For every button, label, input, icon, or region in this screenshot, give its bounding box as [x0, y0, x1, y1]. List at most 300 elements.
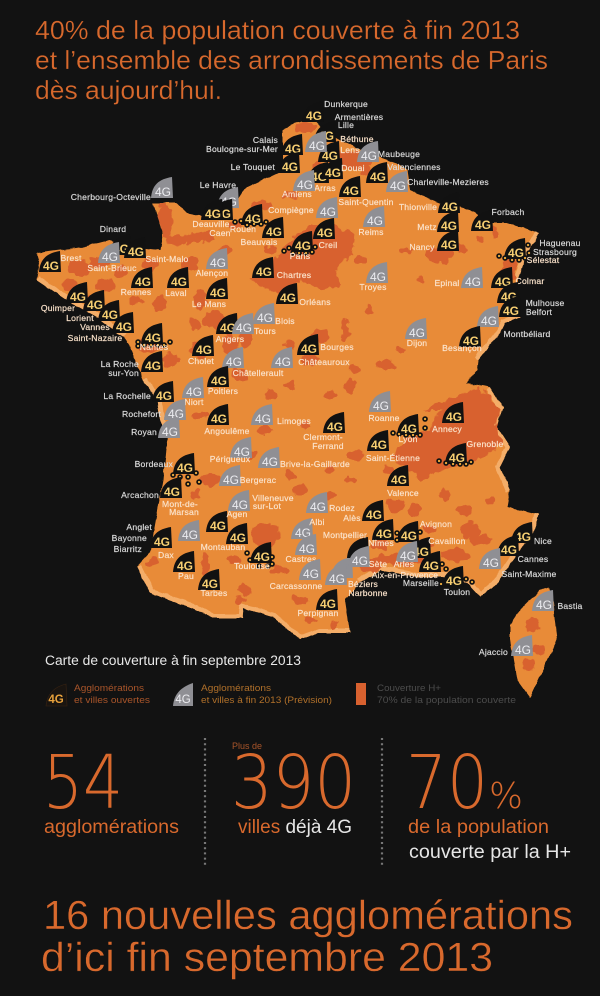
city: Caen: 4G	[215, 207, 231, 221]
city: Castres: 4G	[299, 542, 315, 556]
city: Royan: Royan	[131, 427, 157, 437]
city: Lyon cluster: Lyon	[398, 434, 418, 444]
city: Annecy	[432, 402, 464, 434]
city: Besançon: Besançon	[442, 343, 482, 353]
city: Roanne	[368, 391, 400, 423]
city: Narbonne: 4G	[329, 572, 345, 586]
city: Saint-Étienne	[366, 430, 420, 463]
territory: mainland and Corsica	[37, 118, 557, 698]
city: Saint-Maxime: Saint-Maxime	[502, 569, 556, 579]
city: Saint-Nazaire: 4G	[116, 320, 132, 334]
city: Belfort	[499, 296, 553, 318]
city: Annecy: Annecy	[432, 424, 462, 434]
city: Brest	[39, 251, 82, 273]
footer headline	[41, 892, 573, 980]
city: Châtellerault	[222, 347, 284, 378]
label: Marseille: Marseille	[403, 578, 439, 588]
city: Saint-Quentin: Saint-Quentin	[338, 197, 394, 207]
city: Toulon cluster	[441, 566, 472, 597]
footer headline: d’ici fin septembre 2013	[41, 934, 493, 980]
city: Maubeuge: Maubeuge	[378, 149, 420, 159]
city: Limoges	[251, 404, 311, 426]
city: Valence	[387, 465, 419, 498]
title: et l’ensemble des arrondissements de Paris	[35, 45, 548, 75]
city: Montpellier	[323, 530, 369, 558]
city: Alençon	[196, 248, 228, 278]
city: Châteauroux	[271, 347, 350, 369]
city: Carcassonne	[270, 559, 322, 591]
city: Colmar: 4G	[495, 275, 511, 289]
city: Besançon	[442, 326, 482, 353]
city: Blois: 4G	[257, 311, 273, 325]
city: Ajaccio: 4G	[515, 643, 531, 657]
city: Roanne: 4G	[373, 399, 389, 413]
city: Bastia: Bastia	[557, 601, 583, 611]
city: Aix-en-Provence: 4G	[423, 559, 439, 573]
city: Béthune: 4G	[309, 139, 325, 153]
city: Alençon: Alençon	[196, 268, 228, 278]
city: Reims: 4G	[367, 214, 383, 228]
city: Alès: 4G	[366, 508, 382, 522]
city: Dinard: 4G	[113, 242, 129, 256]
city: Bourges: Bourges	[320, 342, 354, 352]
city: Arras: Arras	[314, 183, 336, 193]
city: La Roche-sur-Yon: sur-Yon	[108, 368, 139, 378]
label: Mont-de-Marsan	[162, 499, 199, 517]
city: Reims: Reims	[358, 227, 384, 237]
city: Dijon: Dijon	[407, 338, 427, 348]
city: Tours: 4G	[236, 321, 252, 335]
city: Aix-en-Provence	[372, 551, 446, 580]
city: Troyes	[359, 262, 388, 292]
city: Lorient: 4G	[87, 298, 103, 312]
city: Perpignan	[298, 589, 339, 618]
legend item: open cities: Agglomérations	[74, 683, 144, 694]
city: Saint-Brieuc: Saint-Brieuc	[87, 263, 137, 273]
city: Poitiers	[207, 366, 238, 396]
city: Boulogne-sur-Mer and Le Touquet: 4G	[282, 160, 298, 174]
legend item: H+ coverage: 70% de la population couverte	[377, 695, 516, 706]
city: Tarbes: 4G	[202, 577, 218, 591]
city: Blois: Blois	[275, 316, 295, 326]
city: Charleville-Mézières	[386, 171, 489, 193]
city: Orléans: 4G	[280, 291, 296, 305]
stat: 54 agglomérations	[43, 740, 179, 838]
city: Limoges: 4G	[255, 412, 271, 426]
stat: 70% de la population: de la population	[408, 817, 549, 838]
city: Colmar: Colmar	[516, 276, 544, 286]
city: Alès: Alès	[343, 513, 361, 523]
city: Narbonne	[325, 564, 388, 598]
city: Saint-Brieuc: 4G	[102, 250, 118, 264]
city: Épinal	[434, 267, 483, 289]
city: Beauvais	[241, 217, 284, 247]
city: Brest: 4G	[43, 259, 59, 273]
city: Valenciennes: 4G	[370, 170, 386, 184]
city: Saint-Quentin: 4G	[343, 184, 359, 198]
city: Boulogne-sur-Mer and Le Touquet	[206, 144, 300, 174]
city: Arras	[307, 162, 336, 193]
city: Laval	[165, 267, 189, 298]
city: Nice: 4G	[515, 530, 531, 544]
city: Villeneuve-sur-Lot: sur-Lot	[253, 501, 281, 511]
city: Montauban: 4G	[230, 531, 246, 545]
city: Pau: 4G	[177, 559, 193, 573]
city: Arles	[394, 541, 418, 569]
city: Armentières and Lille: Armentières	[335, 112, 383, 122]
city: Strasbourg cluster: Haguenau	[539, 238, 581, 248]
city: Rouen cluster: 4G	[245, 212, 261, 226]
city: Bastia	[532, 590, 583, 612]
city: Châtellerault: Châtellerault	[233, 368, 284, 378]
city: Chartres: 4G	[256, 265, 272, 279]
city: Agen: 4G	[210, 519, 226, 533]
city: Bergerac	[219, 465, 277, 487]
city: Sète	[348, 546, 387, 569]
label: Mont-de-Marsan: Marsan	[169, 507, 199, 517]
city: Alençon: 4G	[210, 256, 226, 270]
city: Bordeaux cluster: 4G	[177, 461, 193, 475]
stat: 54 agglomérations: 54	[43, 740, 123, 826]
city: Arras: 4G	[311, 170, 327, 184]
city: Castres	[285, 534, 317, 564]
city: Laval: Laval	[165, 288, 187, 298]
city: Épinal: 4G	[465, 275, 481, 289]
city: Nancy: 4G	[441, 238, 457, 252]
label: Mont-de-Marsan: Mont-de-	[162, 499, 198, 509]
city: Beauvais: 4G	[266, 225, 282, 239]
city: Lens: 4G	[322, 149, 338, 163]
city: Dunkerque: 4G	[306, 109, 322, 123]
city: Nancy	[409, 230, 459, 252]
city: La Roche-sur-Yon: 4G	[145, 359, 161, 373]
city: Forbach: Forbach	[492, 207, 524, 217]
city: Avignon cluster: Avignon	[420, 519, 452, 529]
title: 40% de la population couverte à fin 2013	[35, 15, 520, 45]
city: Nîmes: 4G	[376, 527, 392, 541]
map of France with 4G cities	[37, 99, 583, 698]
city: Charleville-Mézières: 4G	[390, 179, 406, 193]
city: Cannes: Cannes	[518, 554, 548, 564]
city: Anglet, Bayonne, Biarritz: 4G	[154, 535, 170, 549]
city: Bourges: 4G	[301, 342, 317, 356]
city: Rouen cluster	[230, 204, 266, 234]
city: Compiègne: Compiègne	[268, 205, 314, 215]
city: Brive-la-Gaillarde	[258, 447, 350, 469]
city: Boulogne-sur-Mer and Le Touquet: Boulogne-sur-Mer	[206, 144, 278, 154]
city: Compiègne: 4G	[320, 205, 336, 219]
city: Royan: 4G	[162, 425, 178, 439]
title	[35, 15, 548, 105]
city: Niort: Niort	[184, 397, 204, 407]
city: Nice: Nice	[534, 536, 552, 546]
city: Grenoble cluster: Grenoble	[467, 439, 503, 449]
city: Dijon	[405, 318, 427, 348]
city: Angoulême	[204, 404, 250, 436]
city: Le Mans	[192, 278, 228, 309]
legend item: H+ coverage	[356, 683, 516, 706]
city: Douai: 4G	[325, 166, 341, 180]
city: Bourges	[297, 334, 354, 356]
city: Quimper: 4G	[70, 290, 86, 304]
city: Mulhouse: Mulhouse	[526, 298, 564, 308]
city: Épinal: Epinal	[434, 278, 460, 288]
stat: plus de 390 villes: villes déjà 4G	[238, 817, 352, 838]
city: Saint-Maxime: 4G	[483, 556, 499, 570]
city: Villeneuve-sur-Lot: 4G	[232, 498, 248, 512]
city: Béthune	[305, 131, 374, 153]
city: Vannes: Vannes	[80, 322, 110, 332]
city: Rennes: 4G	[135, 275, 151, 289]
city: Saint-Maxime	[479, 548, 556, 579]
city: Blois	[253, 303, 295, 326]
city: Besançon: 4G	[463, 334, 479, 348]
city: Avignon cluster	[397, 519, 452, 543]
city: Armentières and Lille: Lille	[338, 120, 354, 130]
city: Montauban: Montauban	[201, 542, 245, 552]
city: Tarbes: Tarbes	[200, 588, 228, 598]
city: Poitiers: Poitiers	[208, 386, 238, 396]
city: Lorient: Lorient	[66, 313, 94, 323]
H+ coverage areas	[62, 122, 544, 671]
stat: plus de 390 villes: 390	[231, 740, 356, 826]
city: Creil	[313, 218, 337, 250]
city: Cholet	[188, 335, 214, 366]
city: Limoges: Limoges	[277, 416, 311, 426]
city: Carcassonne: 4G	[303, 567, 319, 581]
city: Cherbourg-Octeville: 4G	[155, 185, 171, 199]
city: Valenciennes: Valenciennes	[387, 162, 441, 172]
city: Douai: Douai	[341, 163, 365, 173]
city: Carcassonne: Carcassonne	[270, 581, 322, 591]
city: Nîmes	[368, 519, 394, 548]
city: Cherbourg-Octeville	[71, 177, 173, 202]
city: Villeneuve-sur-Lot	[228, 490, 294, 512]
city: Mulhouse: 4G	[501, 290, 517, 304]
city: Castres: Castres	[285, 554, 317, 564]
city: Albi	[291, 517, 325, 540]
city: Anglet, Bayonne, Biarritz: Anglet	[126, 522, 152, 532]
city: Toulouse cluster: 4G	[254, 550, 270, 564]
city: Nice	[511, 522, 552, 546]
city: Nancy: Nancy	[409, 242, 435, 252]
city: Armentières and Lille	[314, 112, 383, 143]
stat: 70% de la population	[406, 740, 571, 863]
city: Laval: 4G	[171, 275, 187, 289]
city: Clermont-Ferrand	[303, 412, 345, 451]
city: Tours	[232, 313, 276, 336]
city: Strasbourg cluster	[499, 238, 581, 265]
city: Narbonne: Narbonne	[348, 588, 388, 598]
city: Anglet, Bayonne, Biarritz: Bayonne	[112, 533, 147, 543]
footer headline: 16 nouvelles agglomérations	[43, 892, 573, 938]
city: Agen: Agen	[227, 509, 247, 519]
city: Angers	[216, 313, 244, 344]
stat: 70% de la population: %	[489, 776, 523, 817]
city: Bastia: 4G	[536, 598, 552, 612]
city: Le Havre: Le Havre	[200, 180, 236, 190]
divider	[381, 738, 383, 866]
city: Saint-Nazaire: Saint-Nazaire	[68, 333, 122, 343]
city: Clermont-Ferrand: 4G	[327, 420, 343, 434]
city: Montauban	[201, 523, 248, 552]
legend item: cities planned by end 2013	[173, 683, 332, 706]
city: Cholet: Cholet	[188, 356, 214, 366]
city: Caen: Caen	[209, 228, 231, 238]
city: Beauvais: Beauvais	[241, 237, 277, 247]
city: Cavaillon: 4G	[413, 545, 429, 559]
city: Cavaillon	[409, 536, 466, 559]
city: Dax: Dax	[158, 550, 174, 560]
city: Châtellerault: 4G	[226, 355, 242, 369]
city: Nantes cluster	[138, 323, 170, 352]
city: Amiens: 4G	[297, 178, 313, 192]
city: Angers: Angers	[216, 334, 244, 344]
city: Amiens: Amiens	[282, 189, 312, 199]
stat: 54 agglomérations: agglomérations	[44, 817, 179, 838]
city: Saint-Étienne: 4G	[371, 438, 387, 452]
city: Cannes: 4G	[501, 543, 517, 557]
city: Troyes: Troyes	[359, 282, 387, 292]
city: Vannes: 4G	[102, 308, 118, 322]
city: Dunkerque: Dunkerque	[324, 99, 368, 109]
city: Chartres: Chartres	[277, 270, 311, 280]
city: Montbéliard: 4G	[481, 314, 497, 328]
legend item: H+ coverage: Couverture H+	[377, 683, 441, 694]
city: Thionville: Thionville	[399, 202, 437, 212]
city: Lyon cluster	[393, 414, 425, 444]
city: Creil: 4G	[317, 226, 333, 240]
city: Metz	[417, 211, 459, 233]
city: Clermont-Ferrand: Ferrand	[312, 441, 344, 451]
city: Forbach: 4G	[475, 218, 491, 232]
city: Maubeuge	[357, 141, 420, 163]
city: Pau	[173, 551, 195, 581]
city: Rodez: 4G	[310, 500, 326, 514]
city: Rodez: Rodez	[329, 503, 355, 513]
city: Saint-Étienne: Saint-Étienne	[366, 453, 420, 463]
city: Clermont-Ferrand: Clermont-	[303, 432, 343, 442]
city: Lorient	[66, 290, 105, 323]
city: Toulon cluster: Toulon	[444, 587, 470, 597]
city: Angers: 4G	[220, 321, 236, 335]
city: Mulhouse	[497, 282, 564, 308]
city: Rochefort: Rochefort	[122, 409, 161, 419]
city: Nantes cluster: 4G	[145, 331, 161, 345]
city: Paris cluster: Paris	[290, 251, 310, 261]
city: Belfort: Belfort	[526, 307, 553, 317]
city: Bordeaux cluster: Bordeaux	[135, 459, 174, 469]
city: Montbéliard: Montbéliard	[503, 329, 551, 339]
city: Saint-Malo: 4G	[128, 245, 144, 259]
stat: plus de 390 villes: Plus de	[232, 741, 262, 751]
city: Brive-la-Gaillarde: 4G	[262, 455, 278, 469]
city: Saint-Brieuc	[87, 242, 137, 273]
legend item: cities planned by end 2013: Agglomérations	[201, 683, 271, 694]
city: Amiens	[282, 170, 315, 199]
city: Thionville: 4G	[442, 200, 458, 214]
city: Bordeaux cluster	[135, 453, 199, 484]
city: Tours: Tours	[254, 326, 276, 336]
city: Anglet, Bayonne, Biarritz	[112, 522, 172, 554]
city: Ajaccio: Ajaccio	[479, 647, 508, 657]
stat: 70% de la population: couverte par la H+	[409, 842, 571, 863]
city: Grenoble cluster	[439, 439, 503, 465]
city: Nantes cluster: Nantes	[140, 342, 168, 352]
city: Arles: Arles	[394, 559, 414, 569]
city: Nîmes: Nîmes	[368, 538, 394, 548]
city: Arles: 4G	[400, 549, 416, 563]
title: dès aujourd’hui.	[35, 75, 222, 105]
city: Deauville: Deauville	[192, 219, 230, 229]
city: Tarbes	[198, 569, 228, 598]
city: Perpignan: 4G	[320, 597, 336, 611]
city: Lens: Lens	[340, 145, 360, 155]
city: Alès	[343, 500, 384, 523]
city: Toulon cluster: 4G	[446, 574, 462, 588]
city: Périgueux: Périgueux	[210, 454, 251, 464]
city: Saint-Malo: Saint-Malo	[145, 254, 189, 264]
city: Armentières and Lille: 4G	[318, 129, 334, 143]
city: Strasbourg cluster: Strasbourg	[533, 247, 577, 257]
city: Béthune: Béthune	[340, 134, 374, 144]
city: Toulouse cluster: Toulouse	[234, 561, 270, 571]
city: Caen	[209, 199, 233, 238]
city: Calais	[253, 134, 303, 156]
city: Ajaccio	[479, 635, 533, 657]
city: Creil: Creil	[319, 240, 337, 250]
city: Albi: Albi	[309, 517, 325, 527]
city: Niort: 4G	[186, 385, 202, 399]
city: Lens	[318, 141, 360, 163]
city: Thionville	[399, 192, 460, 214]
city: Strasbourg cluster: 4G	[508, 246, 524, 260]
city: Orléans: Orléans	[299, 297, 331, 307]
city: Valence: Valence	[387, 488, 419, 498]
city: Rennes	[121, 267, 153, 297]
city: Orléans	[276, 283, 331, 307]
city: Lyon cluster: 4G	[401, 422, 417, 436]
city: Boulogne-sur-Mer and Le Touquet: Le Touquet	[231, 162, 275, 172]
city: Dunkerque	[302, 99, 368, 123]
city: Vannes	[80, 300, 120, 332]
legend	[45, 653, 516, 706]
city: Dinard	[100, 224, 131, 256]
city: Béziers: Béziers	[348, 579, 378, 589]
city: Toulouse cluster	[234, 542, 272, 571]
city: Saint-Quentin	[338, 176, 394, 207]
city: Chartres	[252, 257, 311, 280]
city: Bergerac: 4G	[223, 473, 239, 487]
city: Dax: 4G	[182, 528, 198, 542]
city: Calais: 4G	[285, 142, 301, 156]
legend item: open cities	[46, 683, 150, 706]
city: La Rochelle: La Rochelle	[103, 391, 151, 401]
city: Cherbourg-Octeville: Cherbourg-Octeville	[71, 192, 151, 202]
stat: 70% de la population: 70	[406, 740, 488, 826]
city: Cavaillon: Cavaillon	[428, 536, 466, 546]
city: Châteauroux: 4G	[275, 355, 291, 369]
city: Dax	[158, 520, 200, 560]
city: Pau: Pau	[178, 571, 194, 581]
city: Périgueux: 4G	[234, 445, 250, 459]
city: Arcachon	[121, 477, 182, 500]
city: Le Havre: 4G	[221, 195, 237, 209]
city: Béziers	[331, 557, 378, 589]
city: Rodez	[306, 492, 355, 514]
city: Périgueux	[210, 437, 252, 464]
city: Châteauroux: Châteauroux	[298, 357, 350, 367]
